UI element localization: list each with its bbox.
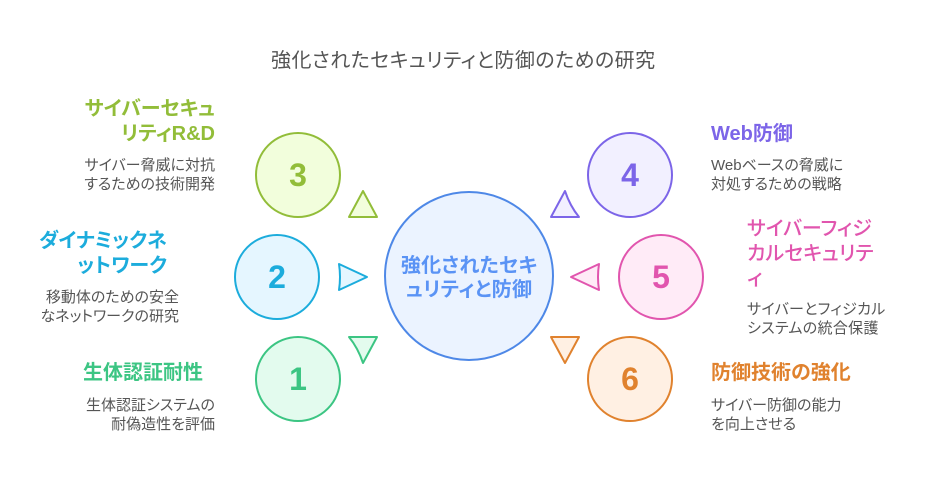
description 1: 耐偽造性を評価 bbox=[111, 416, 215, 432]
heading 3: サイバーセキュ bbox=[85, 98, 215, 120]
circle 3 bbox=[256, 133, 340, 217]
description 3: サイバー脅威に対抗 bbox=[85, 157, 215, 174]
arrow 6 bbox=[551, 337, 579, 363]
circle 3: 3 bbox=[289, 157, 307, 193]
arrow 2 bbox=[339, 264, 367, 290]
description 6 bbox=[711, 397, 841, 432]
description 5 bbox=[747, 301, 886, 336]
heading 5: サイバーフィジ bbox=[747, 218, 872, 240]
heading 5: カルセキュリテ bbox=[747, 243, 873, 265]
heading 1: 生体認証耐性 bbox=[83, 362, 203, 384]
heading 2 bbox=[39, 230, 167, 277]
center label: 強化されたセキ bbox=[401, 255, 537, 277]
description 4: 対処するための戦略 bbox=[711, 176, 842, 192]
circle 6: 6 bbox=[621, 361, 639, 397]
arrow 3 bbox=[349, 191, 377, 217]
heading 3 bbox=[85, 98, 215, 145]
description 2: 移動体のための安全 bbox=[46, 289, 179, 306]
central circle bbox=[385, 192, 553, 360]
description 5: システムの統合保護 bbox=[747, 320, 879, 336]
heading 5 bbox=[747, 218, 873, 290]
arrow 1 bbox=[349, 337, 377, 363]
description 3: するための技術開発 bbox=[84, 176, 215, 192]
heading 2: ダイナミックネ bbox=[39, 230, 167, 252]
heading 6: 防御技術の強化 bbox=[711, 362, 851, 384]
description 6: サイバー防御の能力 bbox=[711, 397, 841, 414]
circle 5: 5 bbox=[652, 259, 670, 295]
description 3 bbox=[84, 157, 215, 192]
circle 4 bbox=[588, 133, 672, 217]
description 4: Webベースの脅威に bbox=[711, 157, 843, 174]
description 1 bbox=[86, 397, 215, 432]
heading 5: ィ bbox=[747, 268, 762, 290]
circle 4: 4 bbox=[621, 157, 639, 193]
circle 2 bbox=[235, 235, 319, 319]
description 6: を向上させる bbox=[711, 416, 796, 432]
circle 2: 2 bbox=[268, 259, 286, 295]
description 2 bbox=[40, 289, 179, 324]
arrow 5 bbox=[571, 264, 599, 290]
description 4 bbox=[711, 157, 843, 192]
heading 2: ットワーク bbox=[77, 255, 167, 277]
heading 4: Web防御 bbox=[711, 123, 793, 145]
description 5: サイバーとフィジカル bbox=[747, 301, 886, 318]
description 1: 生体認証システムの bbox=[86, 397, 215, 414]
center label bbox=[401, 254, 537, 301]
circle 6 bbox=[588, 337, 672, 421]
description 2: なネットワークの研究 bbox=[40, 308, 179, 324]
circle 5 bbox=[619, 235, 703, 319]
heading 3: リティR&D bbox=[121, 123, 215, 145]
center label: ュリティと防御 bbox=[406, 279, 532, 301]
title: 強化されたセキュリティと防御のための研究 bbox=[271, 50, 656, 72]
arrow 4 bbox=[551, 191, 579, 217]
circle 1 bbox=[256, 337, 340, 421]
circle 1: 1 bbox=[289, 361, 307, 397]
